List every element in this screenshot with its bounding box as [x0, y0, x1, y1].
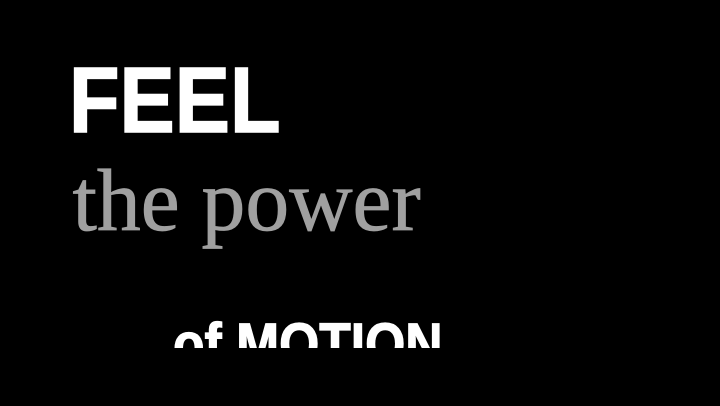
heading: FEEL: FEEL: [68, 48, 280, 152]
subheading: the power: the power: [72, 152, 421, 248]
